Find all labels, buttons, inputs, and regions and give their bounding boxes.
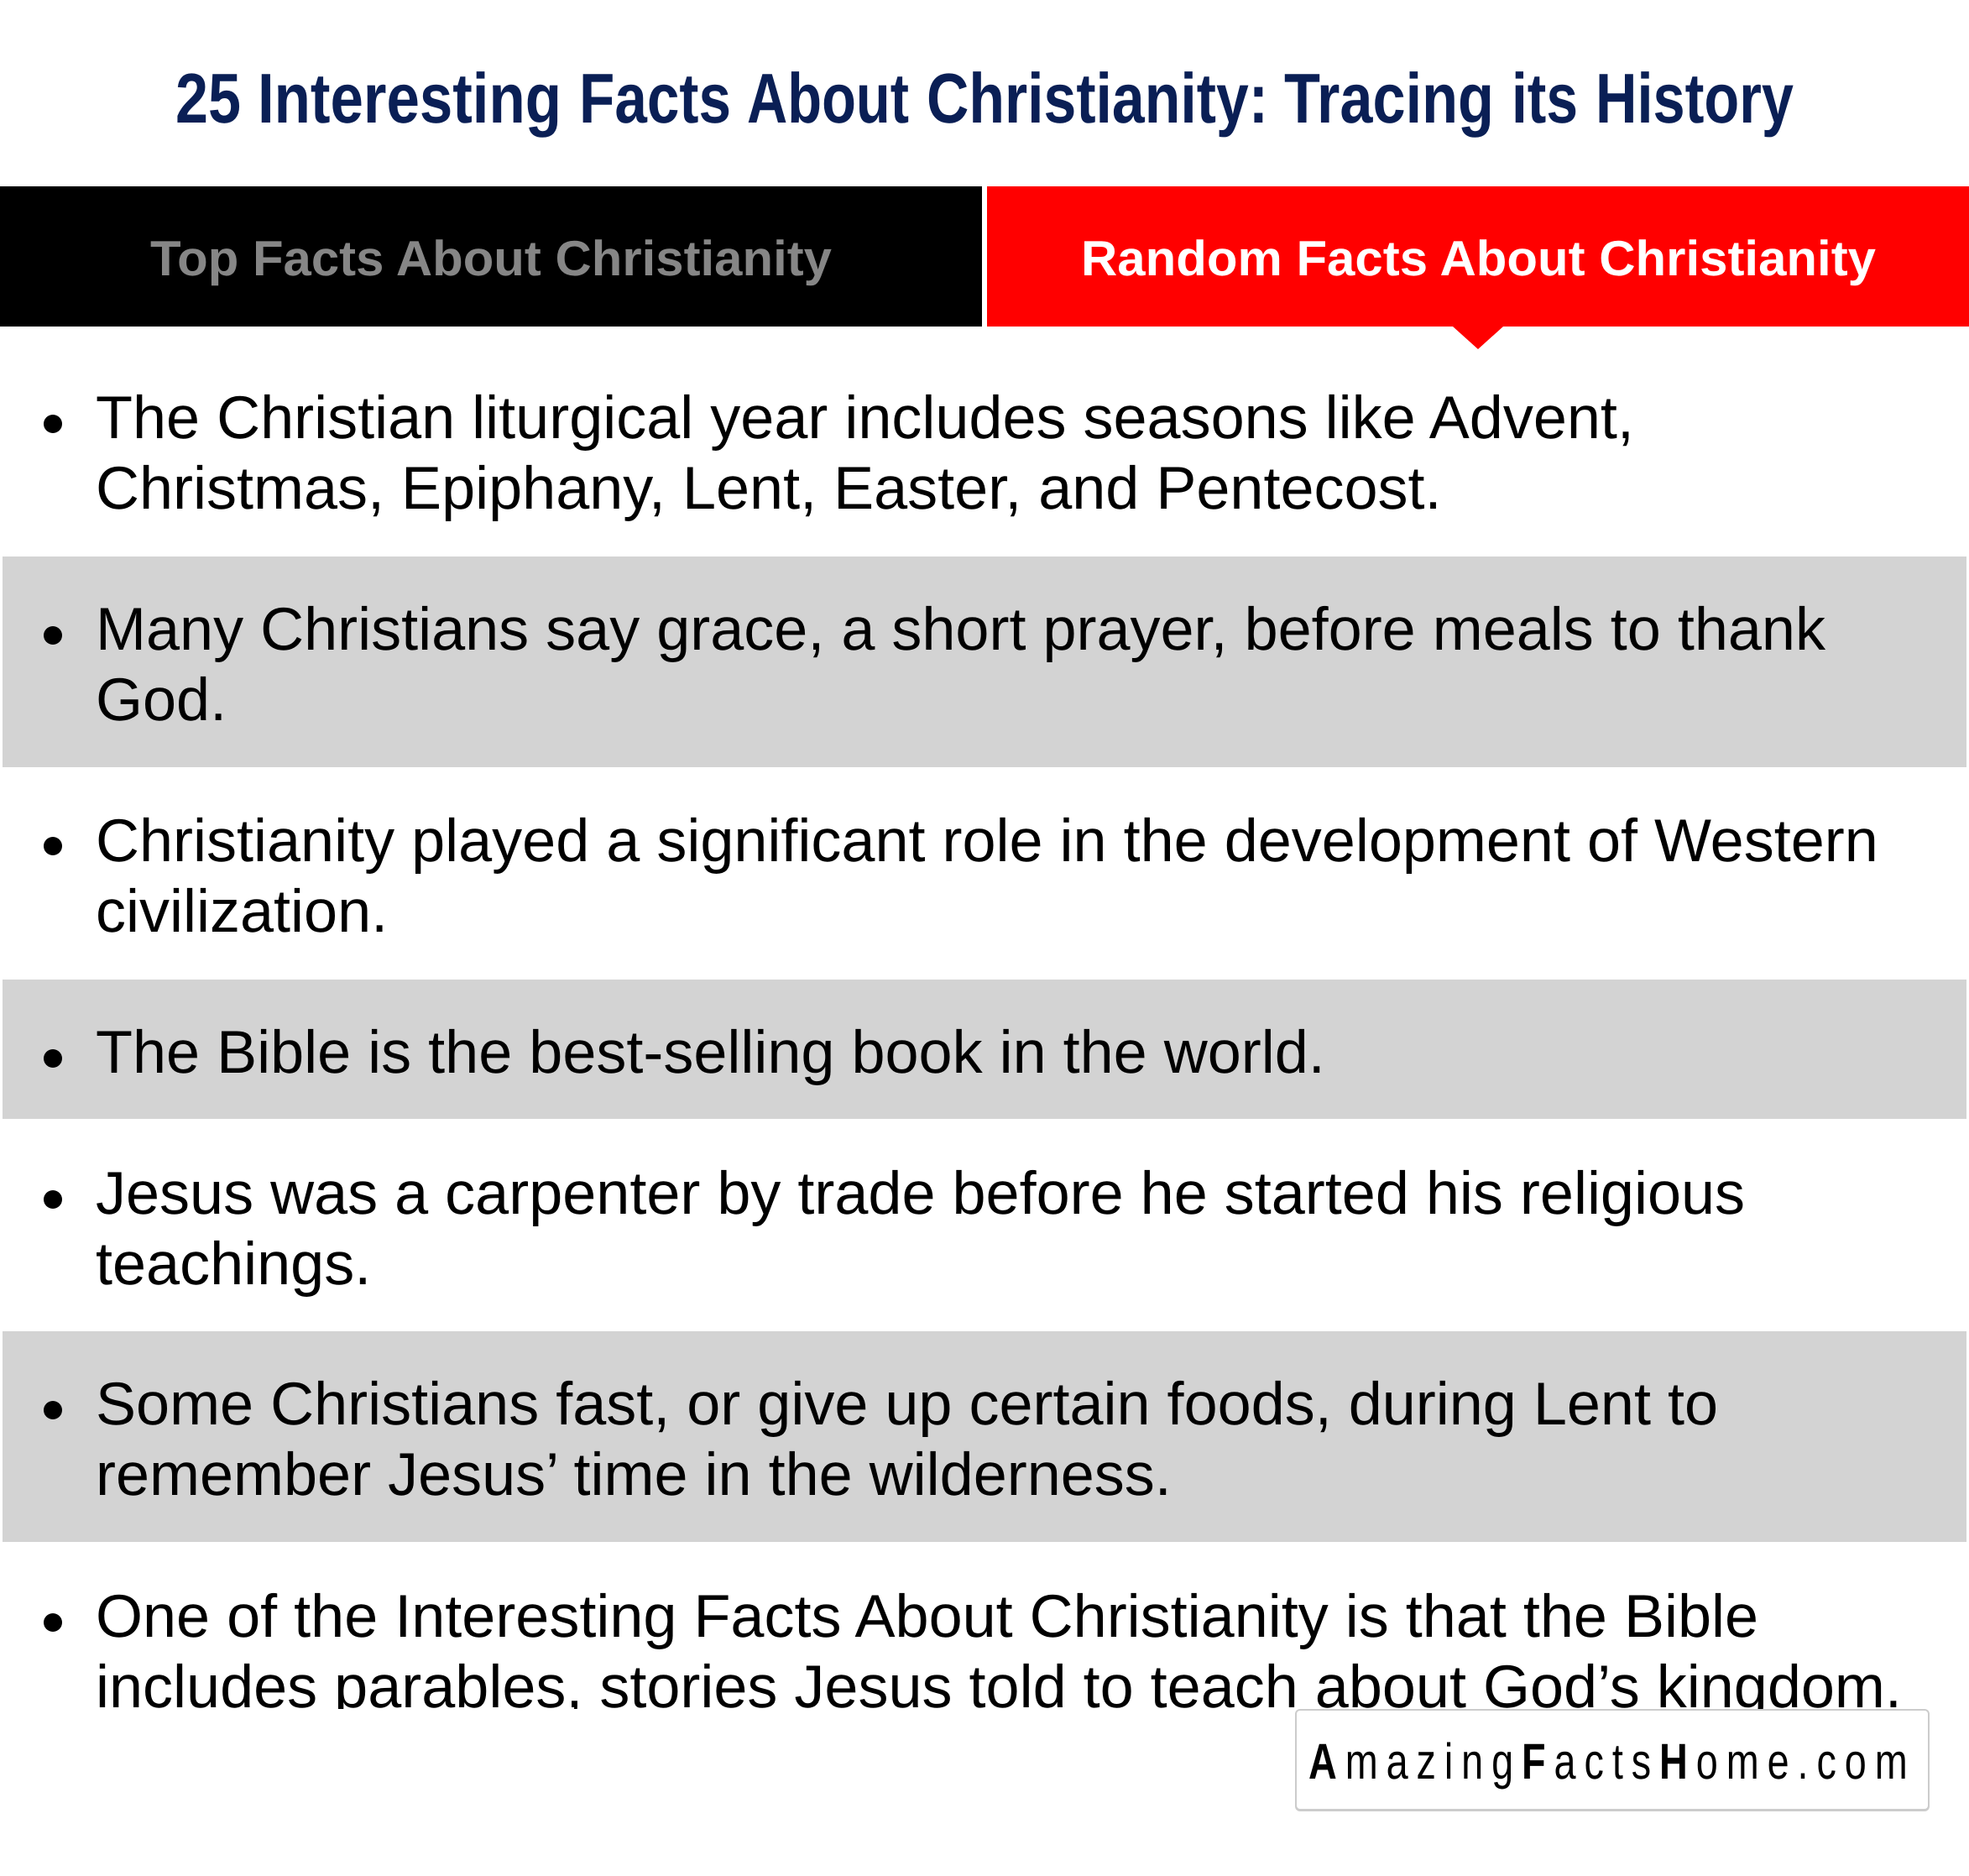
row 6: Some Christians fast, or give up certain foods, during Lent to <box>96 1371 1718 1438</box>
title <box>175 59 1794 138</box>
row 4 <box>3 980 1966 1119</box>
title: Tracing <box>1284 59 1494 138</box>
tab: random facts (active) <box>987 186 1969 349</box>
title: 25 <box>175 59 241 138</box>
row 4: The Bible is the best-selling book in the world. <box>96 1019 1325 1086</box>
row 7: One of the Interesting Facts About Christianity is that the Bible <box>96 1583 1758 1650</box>
row 6: remember Jesus’ time in the wilderness. <box>96 1441 1172 1508</box>
row 5: teachings. <box>96 1231 371 1298</box>
row 5: Jesus was a carpenter by trade before he started his religious <box>96 1160 1745 1227</box>
title: About <box>747 59 909 138</box>
row 1: The Christian liturgical year includes seasons like Advent, <box>96 384 1634 452</box>
row 6 <box>3 1331 1966 1542</box>
row 7: includes parables, stories Jesus told to teach about God’s kingdom. <box>96 1654 1902 1721</box>
watermark: AmazingFactsHome.com <box>1295 1709 1930 1811</box>
row 2: God. <box>96 666 227 734</box>
row 2: Many Christians say grace, a short prayer, before meals to thank <box>96 596 1826 663</box>
title: Facts <box>579 59 731 138</box>
row 2 <box>3 557 1966 767</box>
tab: top facts <box>0 186 982 327</box>
title: Interesting <box>258 59 561 138</box>
tab label: top facts: Top Facts About Christianity <box>150 231 832 286</box>
row 1 <box>44 384 1634 522</box>
title: its <box>1512 59 1578 138</box>
row 3: Christianity played a significant role in the development of Western <box>96 807 1878 875</box>
active tab pointer <box>1453 327 1503 349</box>
row 1: Christmas, Epiphany, Lent, Easter, and Pentecost. <box>96 455 1442 522</box>
tab label: random facts: Random Facts About Christianity <box>1081 231 1876 286</box>
title: History <box>1596 59 1794 138</box>
title: Christianity: <box>927 59 1268 138</box>
row 5 <box>44 1160 1745 1298</box>
row 3: civilization. <box>96 878 388 945</box>
row 7 <box>44 1583 1902 1721</box>
watermark: AmazingFactsHome.com: AmazingFactsHome.com <box>1308 1733 1908 1790</box>
row 3 <box>44 807 1878 945</box>
